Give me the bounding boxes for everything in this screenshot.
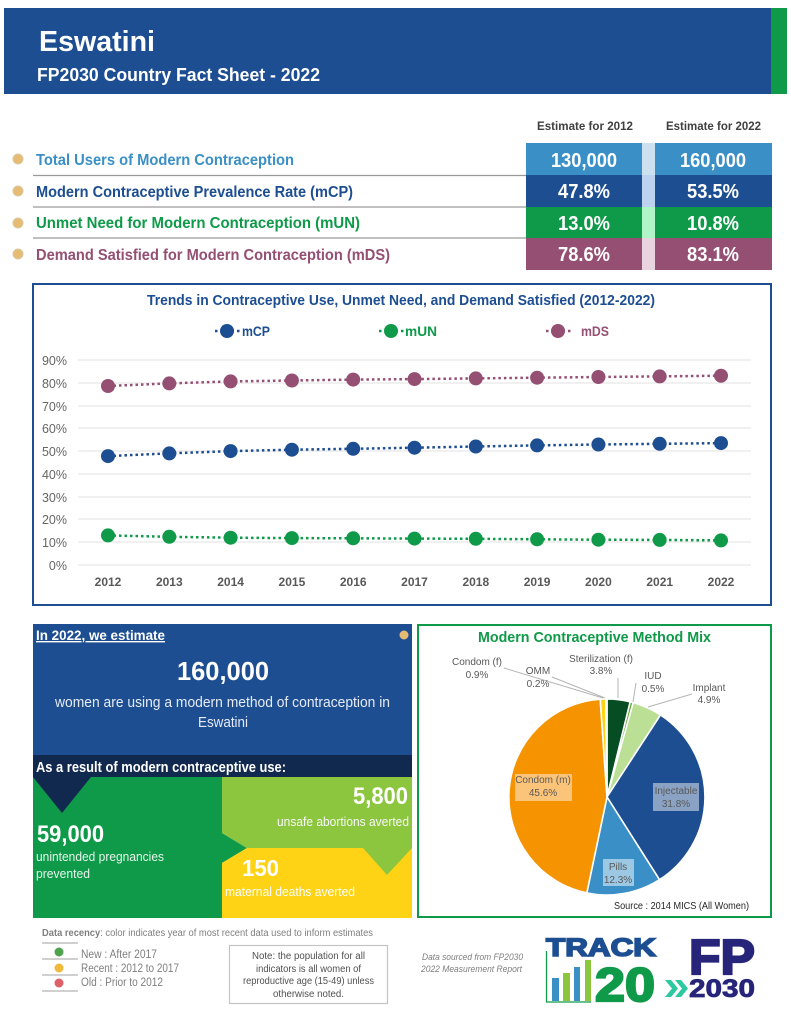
x axis labels: 2020 (585, 575, 612, 589)
y axis labels (42, 354, 67, 573)
x axis labels: 2019 (524, 575, 551, 589)
light green block: unsafe abortions averted: unsafe abortions averted (277, 814, 409, 829)
chart title: Trends in Contraceptive Use, Unmet Need, and Demand Satisfied (2012-2022) (147, 293, 655, 309)
light green block: unsafe abortions averted (222, 777, 412, 875)
data source note: Data sourced from FP2030 (422, 952, 524, 963)
y axis labels: 90% (42, 354, 67, 368)
column headings: Estimate for 2022 (666, 119, 761, 133)
slice labels: IUD (644, 671, 662, 682)
header banner (4, 8, 787, 94)
row: mCP: 53.5% (687, 181, 739, 203)
light green block: unsafe abortions averted: 5,800 (353, 783, 408, 810)
x axis labels: 2018 (462, 575, 489, 589)
series: mUN (101, 528, 728, 547)
slice labels: 12.3% (604, 875, 632, 886)
data recency legend: Recent : 2012 to 2017 (81, 963, 179, 975)
title: Eswatini (39, 26, 155, 58)
population note: reproductive age (15-49) unless (243, 976, 374, 987)
data recency legend: Data recency: color indicates year of most recent data used to inform estimates (42, 928, 373, 939)
slice labels: Injectable (655, 786, 698, 797)
data source note: 2022 Measurement Report (420, 964, 522, 975)
row: mUN: 13.0% (558, 213, 610, 235)
y axis labels: 60% (42, 422, 67, 436)
data recency legend: Old : Prior to 2012 (81, 977, 163, 989)
y axis labels: 70% (42, 400, 67, 414)
data source note (420, 952, 524, 975)
row: total users: 130,000 (551, 150, 617, 172)
slice labels: Sterilization (f) (569, 654, 633, 665)
x axis labels: 2017 (401, 575, 428, 589)
estimate block (33, 624, 412, 755)
x axis labels: 2022 (708, 575, 735, 589)
slice labels: 45.6% (529, 788, 557, 799)
logo: Track20 (546, 934, 656, 1011)
row: total users: 160,000 (680, 150, 746, 172)
series: mCP (101, 436, 728, 463)
yellow block: maternal deaths averted: maternal deaths averted (225, 884, 355, 899)
data recency legend (42, 928, 373, 991)
panel: 2022 estimate and impact (33, 624, 412, 918)
yellow block: maternal deaths averted: 150 (242, 855, 279, 881)
logo: Track20: TRACK (546, 934, 656, 962)
slice labels (452, 654, 726, 886)
x axis labels: 2013 (156, 575, 183, 589)
chart legend: mCP (242, 323, 270, 339)
slice labels: 0.9% (466, 670, 489, 681)
row: mDS: 78.6% (558, 244, 610, 266)
green block: pregnancies prevented: prevented (36, 866, 90, 881)
slice labels: 0.2% (527, 679, 550, 690)
pie slices (509, 699, 705, 895)
series: mDS (101, 369, 728, 393)
green block: pregnancies prevented: unintended pregnancies (36, 849, 164, 864)
x axis labels: 2016 (340, 575, 367, 589)
slice labels: OMM (526, 666, 550, 677)
y axis labels: 20% (42, 513, 67, 527)
data recency legend: New : After 2017 (81, 949, 157, 961)
slice labels: Implant (693, 683, 726, 694)
estimate block: Eswatini (198, 715, 248, 731)
x axis labels: 2012 (95, 575, 122, 589)
slice labels: 0.5% (642, 684, 665, 695)
population note (230, 946, 388, 1004)
chart legend: mUN (405, 323, 437, 339)
x axis labels (95, 575, 735, 589)
pie title: Modern Contraceptive Method Mix (478, 629, 712, 646)
slice labels: 3.8% (590, 666, 613, 677)
chart legend: mDS (581, 323, 609, 339)
row: mCP: Modern Contraceptive Prevalence Rate (mCP) (36, 184, 353, 201)
dark band with pointer: As a result of modern contraceptive use: (36, 760, 286, 776)
panel: method mix pie chart (418, 625, 771, 917)
population note: otherwise noted. (273, 989, 344, 1000)
row: total users (13, 143, 772, 175)
row: mCP (13, 175, 772, 207)
row: mDS: Demand Satisfied for Modern Contraception (mDS) (36, 247, 390, 264)
panel: trends line chart (33, 284, 771, 605)
subtitle: FP2030 Country Fact Sheet - 2022 (37, 65, 320, 85)
y axis labels: 80% (42, 377, 67, 391)
x axis labels: 2015 (279, 575, 306, 589)
y axis labels: 10% (42, 536, 67, 550)
y axis labels: 50% (42, 445, 67, 459)
y axis labels: 0% (49, 559, 67, 573)
estimate block: 160,000 (177, 656, 269, 686)
column headings: Estimate for 2012 (537, 119, 633, 133)
green block: pregnancies prevented (33, 777, 247, 918)
y axis labels: 40% (42, 468, 67, 482)
row: mUN: 10.8% (687, 213, 739, 235)
logo: FP2030: FP (689, 931, 755, 985)
x axis labels: 2014 (217, 575, 244, 589)
column headings (537, 119, 761, 133)
population note: Note: the population for all (252, 951, 365, 962)
row: total users: Total Users of Modern Contraception (36, 152, 294, 169)
pie source: Source : 2014 MICS (All Women) (614, 901, 749, 912)
slice labels: Condom (f) (452, 657, 502, 668)
indicator table (13, 119, 772, 270)
slice labels: Pills (609, 862, 627, 873)
green block: pregnancies prevented: 59,000 (37, 821, 104, 848)
row: mDS: 83.1% (687, 244, 739, 266)
estimate block: women are using a modern method of contraception in (54, 695, 390, 711)
population note: indicators is all women of (256, 964, 361, 975)
row: mUN: Unmet Need for Modern Contraception (mUN) (36, 215, 360, 232)
chart legend (215, 323, 609, 339)
logo: FP2030: 2030 (689, 975, 755, 1003)
slice labels: 4.9% (698, 695, 721, 706)
row: mUN (13, 207, 772, 238)
slice labels: Condom (m) (515, 775, 571, 786)
estimate block: In 2022, we estimate (36, 627, 165, 643)
logo: FP2030 (665, 931, 755, 1003)
row: mDS (13, 238, 772, 270)
row: mCP: 47.8% (558, 181, 610, 203)
dark band with pointer (33, 755, 412, 813)
x axis labels: 2021 (646, 575, 673, 589)
slice labels: 31.8% (662, 799, 690, 810)
yellow block: maternal deaths averted (222, 848, 412, 918)
y axis labels: 30% (42, 491, 67, 505)
logo: Track20: 20 (595, 958, 655, 1011)
